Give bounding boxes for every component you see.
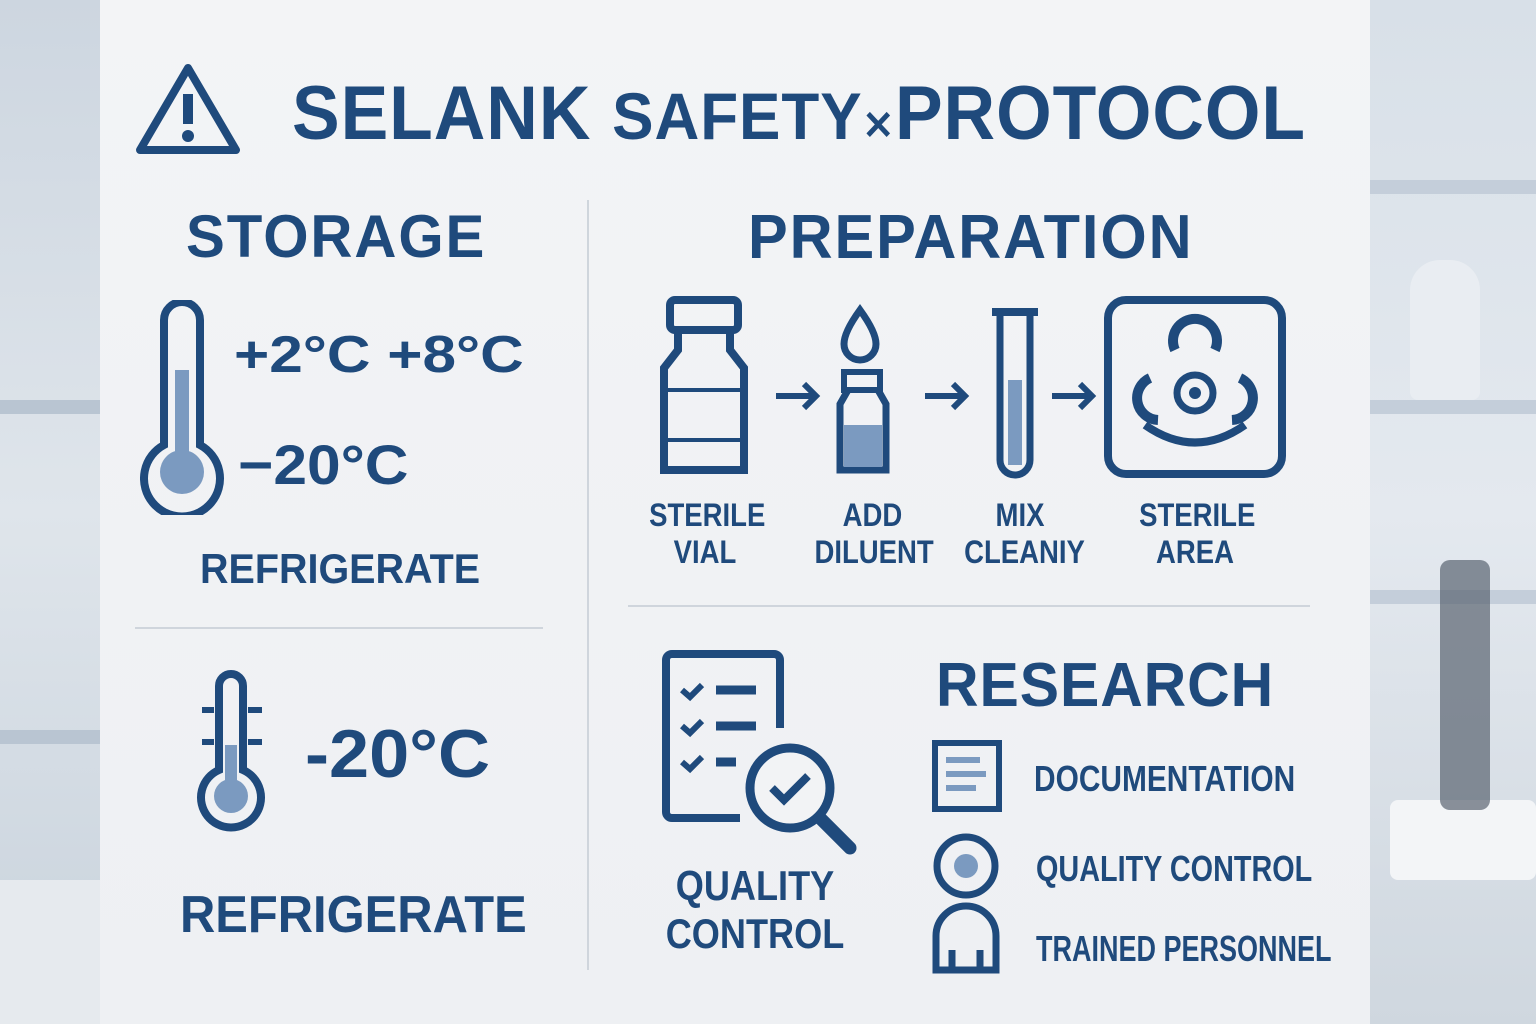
- arrow: [1052, 384, 1092, 408]
- heading: preparation: PREPARATION: [748, 203, 1194, 272]
- label: sterile area: [1139, 497, 1255, 570]
- label: sterile area: STERILE: [1139, 497, 1255, 533]
- background: lab shelves left: [0, 0, 100, 1024]
- icon: test tube: [992, 308, 1038, 475]
- label: quality control: CONTROL: [666, 910, 844, 957]
- icon: biohazard box: [1108, 300, 1282, 474]
- label: quality control: [666, 862, 844, 957]
- label: sterile vial: VIAL: [674, 534, 736, 570]
- icon: person: [936, 906, 996, 970]
- heading: storage: STORAGE: [186, 203, 486, 270]
- preparation steps: [660, 296, 1286, 478]
- text: temperature range: +2°C +8°C: [234, 326, 524, 384]
- label: sterile vial: STERILE: [649, 497, 765, 533]
- text: -20C: −20°C: [238, 433, 408, 496]
- icon: quality control clipboard: [662, 650, 856, 854]
- label: quality control list: QUALITY CONTROL: [1036, 848, 1312, 889]
- label: refrigerate 1: REFRIGERATE: [200, 545, 480, 592]
- label: add diluent: ADD: [843, 497, 902, 533]
- label: documentation: DOCUMENTATION: [1034, 758, 1295, 799]
- icon: sterile vial: [664, 300, 744, 470]
- label: refrigerate 2: REFRIGERATE: [180, 886, 527, 944]
- label: sterile area: AREA: [1156, 534, 1234, 570]
- icon: thermometer small: [197, 670, 265, 832]
- text: -20C second: -20°C: [305, 716, 490, 792]
- label: trained personnel: TRAINED PERSONNEL: [1036, 928, 1332, 969]
- label: add diluent: DILUENT: [814, 534, 934, 570]
- icon: add diluent: [840, 310, 886, 470]
- arrow: [925, 384, 965, 408]
- icon: warning triangle: [136, 64, 240, 154]
- icon: quality seal: [937, 837, 995, 895]
- research list: [932, 740, 1002, 974]
- icon: thermometer large: [140, 300, 224, 515]
- label: mix cleanly: CLEANIY: [964, 534, 1085, 570]
- heading: research: RESEARCH: [936, 651, 1274, 720]
- icon: document: [935, 743, 999, 809]
- label: mix cleanly: MIX: [996, 497, 1044, 533]
- label: sterile vial: [649, 497, 765, 570]
- label: mix cleanly: [964, 497, 1085, 570]
- title: SELANK SAFETY✕PROTOCOL: [292, 71, 1306, 156]
- label: quality control: QUALITY: [676, 862, 834, 909]
- arrow: [776, 384, 816, 408]
- label: add diluent: [814, 497, 934, 570]
- background: lab shelves right: [1370, 0, 1536, 1024]
